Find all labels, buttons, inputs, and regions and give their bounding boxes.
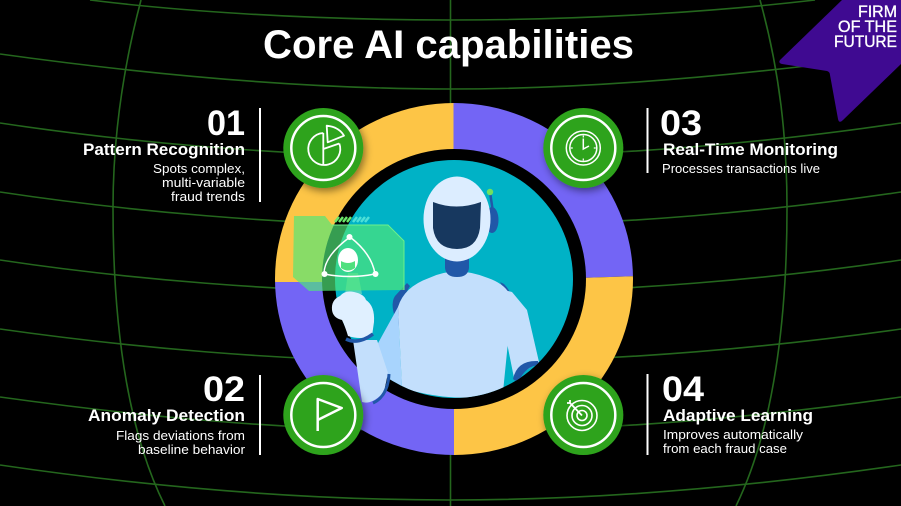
block 04: from each fraud case [663, 441, 787, 456]
block 04: Improves automatically [663, 427, 804, 442]
badge: firm of the future: FUTURE [834, 33, 897, 51]
block 02: baseline behavior [138, 442, 246, 457]
robot forearm [353, 340, 389, 403]
block 04: 04 [662, 370, 705, 409]
block 03: Processes transactions live [662, 161, 820, 176]
block 01: Spots complex, [153, 161, 245, 176]
block 02: 02 [203, 370, 245, 409]
block 01: 01 [207, 104, 245, 143]
block 03 [646, 104, 838, 176]
icon: flag [283, 375, 363, 455]
block 01: Pattern Recognition [83, 141, 245, 159]
robot torso and right arm [377, 272, 539, 398]
glowing folder [293, 216, 404, 294]
robot visor [433, 202, 481, 249]
folder tab stripes [335, 217, 369, 222]
title: Core AI capabilities [263, 23, 634, 67]
block 01: fraud trends [171, 189, 246, 204]
block 04 [646, 370, 813, 456]
network triangle icon [322, 234, 378, 277]
badge: firm of the future: OF THE [838, 18, 897, 36]
block 03: 03 [660, 104, 702, 143]
block 01 [83, 104, 261, 204]
donut ring [270, 98, 640, 460]
inner black circle [322, 149, 586, 409]
block 02 [88, 370, 261, 457]
beam from finger [345, 273, 362, 294]
block 02: Flags deviations from [116, 428, 245, 443]
robot antenna and ear [486, 189, 498, 233]
robot hand [332, 292, 374, 341]
icon: target [543, 375, 623, 455]
badge: firm of the future [779, 0, 901, 122]
icon: clock [543, 108, 623, 188]
block 03: Real-Time Monitoring [663, 141, 838, 159]
robot neck [445, 258, 469, 277]
icon: pie chart [283, 108, 363, 188]
robot [353, 176, 539, 403]
badge: firm of the future: FIRM [858, 3, 897, 21]
block 02: Anomaly Detection [88, 407, 245, 425]
block 04: Adaptive Learning [663, 407, 813, 425]
teal circle [335, 160, 573, 398]
block 01: multi-variable [162, 175, 245, 190]
robot head [424, 176, 490, 262]
